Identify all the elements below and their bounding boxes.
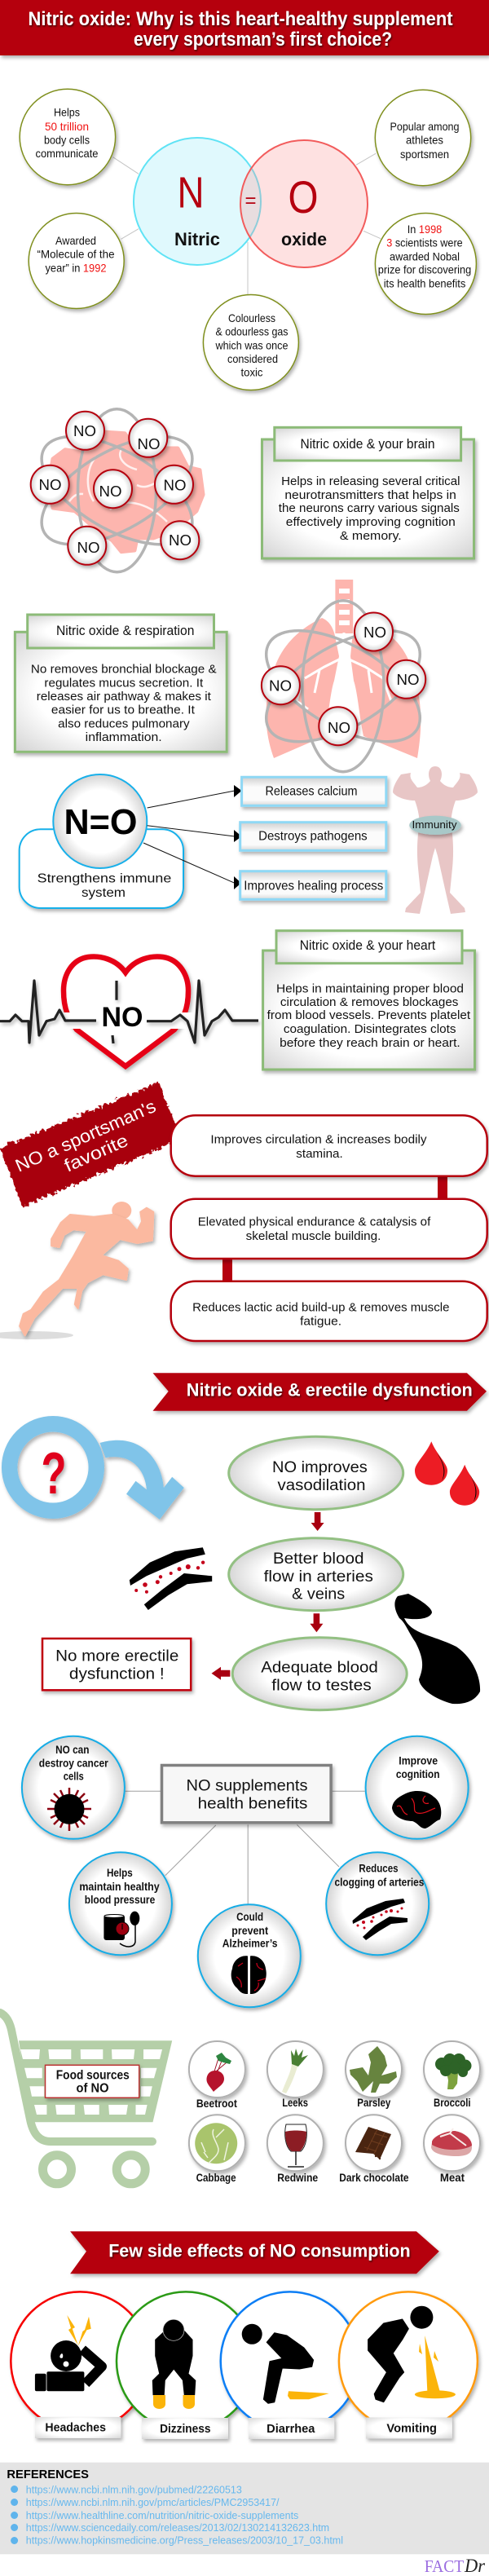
- food: beetroot: [189, 2041, 245, 2110]
- pill: endurance: [171, 1199, 487, 1259]
- fact: colourless gas: Colourless: [228, 311, 275, 324]
- food: cabbage: Cabbage: [196, 2171, 236, 2184]
- food: leeks: Leeks: [282, 2096, 308, 2109]
- flow step: adequate blood flow: Adequate blood: [261, 1660, 378, 1677]
- venn circle: nitric: N: [178, 168, 204, 217]
- panel: nitric oxide and your brain: [262, 427, 474, 558]
- venn circle: oxide: oxide: [281, 229, 327, 249]
- panel: nitric oxide and your heart: coagulation. Disintegrates clots: [284, 1022, 456, 1036]
- fact: molecule of the year: Awarded: [55, 234, 96, 247]
- icon: runner: [0, 1202, 153, 1339]
- icon: artery: [130, 1547, 212, 1610]
- icon: anatomical silhouette: [394, 1594, 480, 1704]
- fact: popular among athletes: athletes: [406, 134, 443, 147]
- arrow: step one to two: [311, 1512, 324, 1531]
- panel: nitric oxide and your heart: from blood vessels. Prevents platelet: [267, 1008, 471, 1022]
- benefit: destroy cancer cells: cells: [64, 1770, 84, 1783]
- fact: colourless gas: & odourless gas: [215, 325, 289, 338]
- panel: nitric oxide and your heart: before they reach brain or heart.: [280, 1036, 460, 1050]
- NO molecules: NO: [169, 532, 192, 549]
- illustration: lungs with NO atoms: [249, 580, 438, 772]
- panel: strengthens immune system: system: [82, 886, 126, 900]
- benefit: blood pressure: maintain healthy: [79, 1880, 160, 1893]
- panel: nitric oxide and respiration: [15, 615, 227, 752]
- references section: REFERENCES: [7, 2468, 89, 2481]
- fact: nobel prize: prize for discovering: [378, 263, 471, 276]
- panel: nitric oxide and respiration: No removes bronchial blockage &: [31, 663, 217, 677]
- icon: shopping cart with food sources label: [0, 2013, 172, 2184]
- references section: [0, 2463, 489, 2554]
- fact: 50 trillion: Helps: [54, 106, 80, 119]
- label: headaches: [35, 2417, 121, 2438]
- NO molecules: NO: [269, 677, 292, 695]
- fact: 50 trillion: communicate: [36, 147, 99, 160]
- fact: colourless gas: [203, 295, 298, 390]
- side effect: dizziness: [117, 2291, 255, 2430]
- fact: nobel prize: In 1998: [408, 223, 442, 236]
- panel: nitric oxide and respiration: regulates mucus secretion. It: [44, 677, 204, 690]
- food: meat: [424, 2115, 480, 2184]
- panel: nitric oxide and respiration: Nitric oxide & respiration: [56, 624, 194, 638]
- food: parsley: [346, 2041, 402, 2109]
- heading: NO a sportsman's favorite: favorite: [61, 1130, 131, 1176]
- label: diarrhea: [249, 2418, 334, 2439]
- NO molecules: [262, 613, 425, 745]
- panel: nitric oxide and your brain: neurotransmitters that helps in: [284, 488, 456, 502]
- flow step: better blood flow: [229, 1538, 403, 1611]
- food: red wine: [267, 2115, 324, 2184]
- central box: NO supplements: [186, 1778, 308, 1795]
- benefit: destroy cancer cells: [22, 1736, 125, 1839]
- fact: popular among athletes: sportsmen: [400, 148, 449, 161]
- NO molecules: NO: [73, 422, 96, 439]
- fact: nobel prize: its health benefits: [384, 277, 465, 290]
- illustration: brain with NO atoms: [24, 409, 209, 572]
- icon: male symbol with question mark: ?: [41, 1441, 67, 1506]
- side effect: diarrhea: [221, 2291, 359, 2430]
- NO molecules: NO: [77, 539, 99, 556]
- heading banner: side effects: Few side effects of NO consumption: [108, 2240, 411, 2261]
- box: improves healing process: Improves healing process: [244, 880, 383, 893]
- references section: https://www.ncbi.nlm.nih.gov/pubmed/22260513: [26, 2484, 242, 2495]
- panel: nitric oxide facts: [20, 89, 476, 390]
- NO molecules: NO: [163, 476, 186, 494]
- flow step: adequate blood flow: [232, 1638, 407, 1710]
- fact: 50 trillion: body cells: [44, 134, 90, 147]
- icon: muscular body with immunity label: [393, 766, 478, 914]
- title banner: Nitric oxide: Why is this heart-healthy supplement: [28, 8, 453, 30]
- fact: colourless gas: which was once: [215, 338, 289, 351]
- panel: nitric oxide and respiration: releases air pathway & makes it: [37, 690, 212, 704]
- icon: muscular body with immunity label: Immunity: [412, 818, 457, 831]
- central box: [161, 1766, 331, 1823]
- food: dark chocolate: Dark chocolate: [339, 2171, 409, 2184]
- heading banner: erectile dysfunction: [153, 1373, 487, 1411]
- label: food sources: Food sources: [56, 2069, 130, 2083]
- panel: nitric oxide and your heart: [263, 931, 474, 1070]
- NO molecules: [31, 412, 199, 565]
- panel: NO supplements health benefits: [22, 1736, 469, 2007]
- fact: molecule of the year: “Molecule of the: [37, 248, 115, 261]
- icon: male symbol with question mark: [10, 1424, 184, 1520]
- illustration: heart with ECG line: NO: [101, 1002, 143, 1033]
- benefit: blood pressure: blood pressure: [85, 1893, 155, 1906]
- references section: https://www.ncbi.nlm.nih.gov/pmc/articles/PMC2953417/: [26, 2497, 280, 2508]
- title banner: every sportsman’s first choice?: [134, 29, 392, 51]
- fact: molecule of the year: [29, 214, 124, 308]
- pill: lactic acid: Reduces lactic acid build-up & removes muscle: [192, 1301, 449, 1315]
- food: red wine: Redwine: [277, 2171, 318, 2184]
- heading: NO a sportsman's favorite: [0, 1083, 181, 1206]
- panel: nitric oxide and your heart: Helps in maintaining proper blood: [276, 981, 464, 995]
- flow step: NO improves vasodilation: NO improves: [272, 1459, 368, 1476]
- food: beetroot: Beetroot: [196, 2097, 237, 2110]
- benefit: improve cognition: [366, 1736, 469, 1839]
- benefit: could prevent Alzheimer's: Could: [236, 1910, 263, 1923]
- fact: 50 trillion: [20, 89, 116, 185]
- NO molecules: NO: [99, 483, 122, 500]
- pill: circulation: [171, 1115, 487, 1176]
- references section: https://www.healthline.com/nutrition/nitric-oxide-supplements: [26, 2510, 298, 2521]
- logo: FactDr: Dr: [464, 2556, 486, 2576]
- side effect: vomiting: [339, 2291, 478, 2430]
- panel: nitric oxide and your brain: the neurons carry various signals: [279, 501, 460, 515]
- panel: nitric oxide and respiration: also reduces pulmonary: [58, 717, 190, 731]
- benefit: destroy cancer cells: NO can: [55, 1743, 89, 1756]
- box: no more erectile dysfunction: [42, 1639, 191, 1690]
- benefit: improve cognition: Improve: [399, 1753, 438, 1767]
- label: dizziness: Dizziness: [160, 2422, 210, 2436]
- food: cabbage: [189, 2115, 245, 2184]
- benefit: reduces clogging of arteries: clogging of arteries: [334, 1876, 424, 1889]
- pill: lactic acid: [171, 1281, 487, 1341]
- flow step: better blood flow: flow in arteries: [264, 1568, 373, 1586]
- arrow: to result box: [212, 1667, 230, 1680]
- benefit: could prevent Alzheimer's: Alzheimer’s: [222, 1937, 278, 1950]
- food: leeks: [267, 2041, 324, 2109]
- illustration: heart with ECG line: [0, 957, 258, 1066]
- benefit: reduces clogging of arteries: Reduces: [359, 1862, 399, 1875]
- NO molecules: NO: [396, 671, 419, 688]
- box: destroys pathogens: Destroys pathogens: [258, 830, 368, 844]
- benefit: blood pressure: Helps: [107, 1866, 133, 1879]
- benefit: reduces clogging of arteries: [326, 1852, 429, 1955]
- pill: endurance: skeletal muscle building.: [246, 1229, 381, 1243]
- heading banner: side effects: [70, 2231, 439, 2274]
- food: broccoli: [424, 2041, 480, 2109]
- panel: strengthens immune system: [20, 774, 183, 908]
- flow step: NO improves vasodilation: vasodilation: [277, 1477, 365, 1494]
- label: headaches: Headaches: [45, 2421, 106, 2435]
- fact: nobel prize: [375, 214, 476, 315]
- fact: nobel prize: 3 scientists were: [386, 236, 463, 249]
- panel: nitric oxide and your brain: Helps in releasing several critical: [281, 474, 460, 488]
- pill: lactic acid: fatigue.: [300, 1315, 341, 1329]
- fact: 50 trillion: 50 trillion: [45, 120, 89, 133]
- central box: health benefits: [198, 1796, 307, 1813]
- label: vomiting: [366, 2418, 452, 2439]
- panel: strengthens immune system: N=O: [64, 802, 137, 842]
- benefit: could prevent Alzheimer's: [198, 1904, 301, 2007]
- box: improves healing process: [240, 871, 386, 899]
- label: food sources: of NO: [77, 2082, 109, 2096]
- logo: FactDr: [425, 2556, 486, 2576]
- panel: nitric oxide and respiration: inflammation.: [86, 730, 162, 744]
- label: food sources: [46, 2065, 139, 2097]
- title banner: [0, 0, 489, 55]
- pill: endurance: Elevated physical endurance & catalysis of: [198, 1215, 431, 1229]
- icon: blood drops: [415, 1441, 479, 1506]
- flow step: better blood flow: & veins: [292, 1586, 345, 1603]
- venn circle: nitric: Nitric: [174, 229, 220, 249]
- panel: nitric oxide and your heart: Nitric oxide & your heart: [300, 938, 436, 953]
- fact: popular among athletes: [375, 90, 471, 186]
- label: diarrhea: Diarrhea: [267, 2422, 315, 2436]
- flow: sportsman benefits: [171, 1115, 487, 1341]
- NO molecules: NO: [39, 476, 62, 493]
- flow step: NO improves vasodilation: [229, 1436, 403, 1510]
- panel: strengthens immune system: Strengthens immune: [37, 872, 171, 886]
- food: meat: Meat: [440, 2171, 465, 2184]
- logo: FactDr: FACT: [425, 2556, 464, 2576]
- panel: nitric oxide and your brain: Nitric oxide & your brain: [300, 437, 435, 452]
- label: vomiting: Vomiting: [386, 2421, 437, 2435]
- side effect: headaches: [11, 2291, 149, 2430]
- venn circle: oxide: [240, 140, 368, 267]
- flow step: adequate blood flow: flow to testes: [271, 1678, 372, 1695]
- flow step: better blood flow: Better blood: [273, 1550, 364, 1568]
- box: releases calcium: [242, 777, 386, 805]
- benefit: could prevent Alzheimer's: prevent: [231, 1924, 268, 1937]
- food: parsley: Parsley: [357, 2096, 390, 2109]
- arrow: step two to three: [310, 1613, 323, 1632]
- NO molecules: NO: [137, 435, 160, 452]
- pill: circulation: Improves circulation & increases bodily: [210, 1133, 427, 1147]
- panel: nitric oxide and respiration: easier for us to breathe. It: [51, 704, 196, 717]
- pill: circulation: stamina.: [296, 1147, 343, 1161]
- references section: https://www.sciencedaily.com/releases/2013/02/130214132623.htm: [26, 2522, 329, 2534]
- NO molecules: NO: [328, 719, 350, 736]
- food: broccoli: Broccoli: [434, 2096, 471, 2109]
- panel: nitric oxide and your brain: effectively improving cognition: [286, 515, 456, 529]
- box: releases calcium: Releases calcium: [266, 785, 357, 799]
- venn circle: oxide: O: [289, 171, 318, 223]
- benefit: blood pressure: [69, 1852, 172, 1955]
- arrows: immune effects: [143, 785, 242, 889]
- heading: NO a sportsman's favorite: NO a sportsman's: [12, 1096, 159, 1176]
- benefit: destroy cancer cells: destroy cancer: [39, 1757, 108, 1770]
- box: destroys pathogens: [240, 823, 386, 850]
- box: no more erectile dysfunction: No more erectile: [55, 1648, 178, 1665]
- fact: colourless gas: considered: [227, 352, 278, 365]
- NO molecules: NO: [363, 624, 386, 641]
- venn circle: nitric: [134, 138, 261, 265]
- fact: molecule of the year: year” in 1992: [46, 261, 107, 274]
- fact: nobel prize: awarded Nobal: [390, 249, 460, 262]
- venn circle: oxide: =: [244, 190, 256, 212]
- panel: nitric oxide and your heart: circulation & removes blockages: [280, 995, 458, 1009]
- panel: nitric oxide and your brain: & memory.: [340, 529, 402, 543]
- benefit: improve cognition: cognition: [396, 1767, 440, 1780]
- fact: colourless gas: toxic: [241, 366, 262, 379]
- box: no more erectile dysfunction: dysfunction !: [69, 1665, 165, 1683]
- heading banner: erectile dysfunction: Nitric oxide & erectile dysfunction: [187, 1380, 473, 1400]
- references section: https://www.hopkinsmedicine.org/Press_releases/2003/10_17_03.html: [26, 2535, 343, 2547]
- label: dizziness: [142, 2418, 228, 2439]
- fact: popular among athletes: Popular among: [390, 120, 460, 133]
- food: dark chocolate: [339, 2115, 409, 2184]
